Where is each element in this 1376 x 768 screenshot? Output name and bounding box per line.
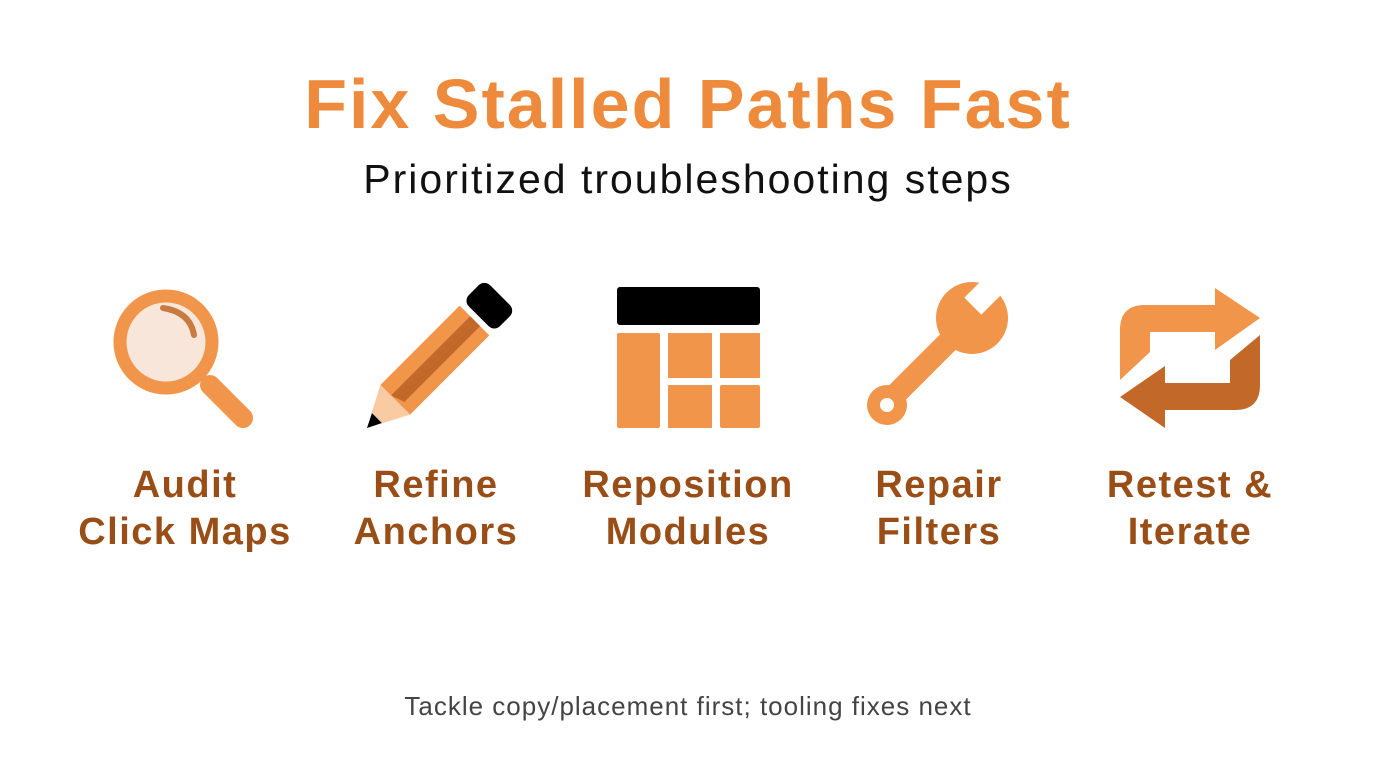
label: retest: Retest & bbox=[1107, 464, 1273, 506]
subtitle: Prioritized troubleshooting steps bbox=[363, 156, 1013, 202]
label: repair bbox=[875, 464, 1003, 553]
label: retest bbox=[1107, 464, 1273, 553]
label: audit bbox=[78, 464, 292, 553]
label: reposition: Modules bbox=[606, 511, 770, 553]
label: refine: Refine bbox=[373, 464, 499, 506]
icon: repeat arrows bbox=[1120, 288, 1260, 428]
label: audit: Audit bbox=[133, 464, 237, 506]
label: reposition bbox=[582, 464, 794, 553]
label: reposition: Reposition bbox=[582, 464, 794, 506]
label: repair: Repair bbox=[875, 464, 1003, 506]
icon: wrench bbox=[867, 269, 1010, 425]
label: retest: Iterate bbox=[1128, 511, 1252, 553]
label: refine: Anchors bbox=[354, 511, 518, 553]
footer: Tackle copy/placement first; tooling fixes next bbox=[404, 691, 972, 721]
label: refine bbox=[354, 464, 518, 553]
title: Fix Stalled Paths Fast bbox=[304, 65, 1072, 143]
label: repair: Filters bbox=[877, 511, 1001, 553]
icon: pencil bbox=[351, 280, 515, 444]
icon: magnifier bbox=[120, 296, 243, 418]
icon: table layout bbox=[617, 287, 760, 428]
label: audit: Click Maps bbox=[78, 511, 292, 553]
